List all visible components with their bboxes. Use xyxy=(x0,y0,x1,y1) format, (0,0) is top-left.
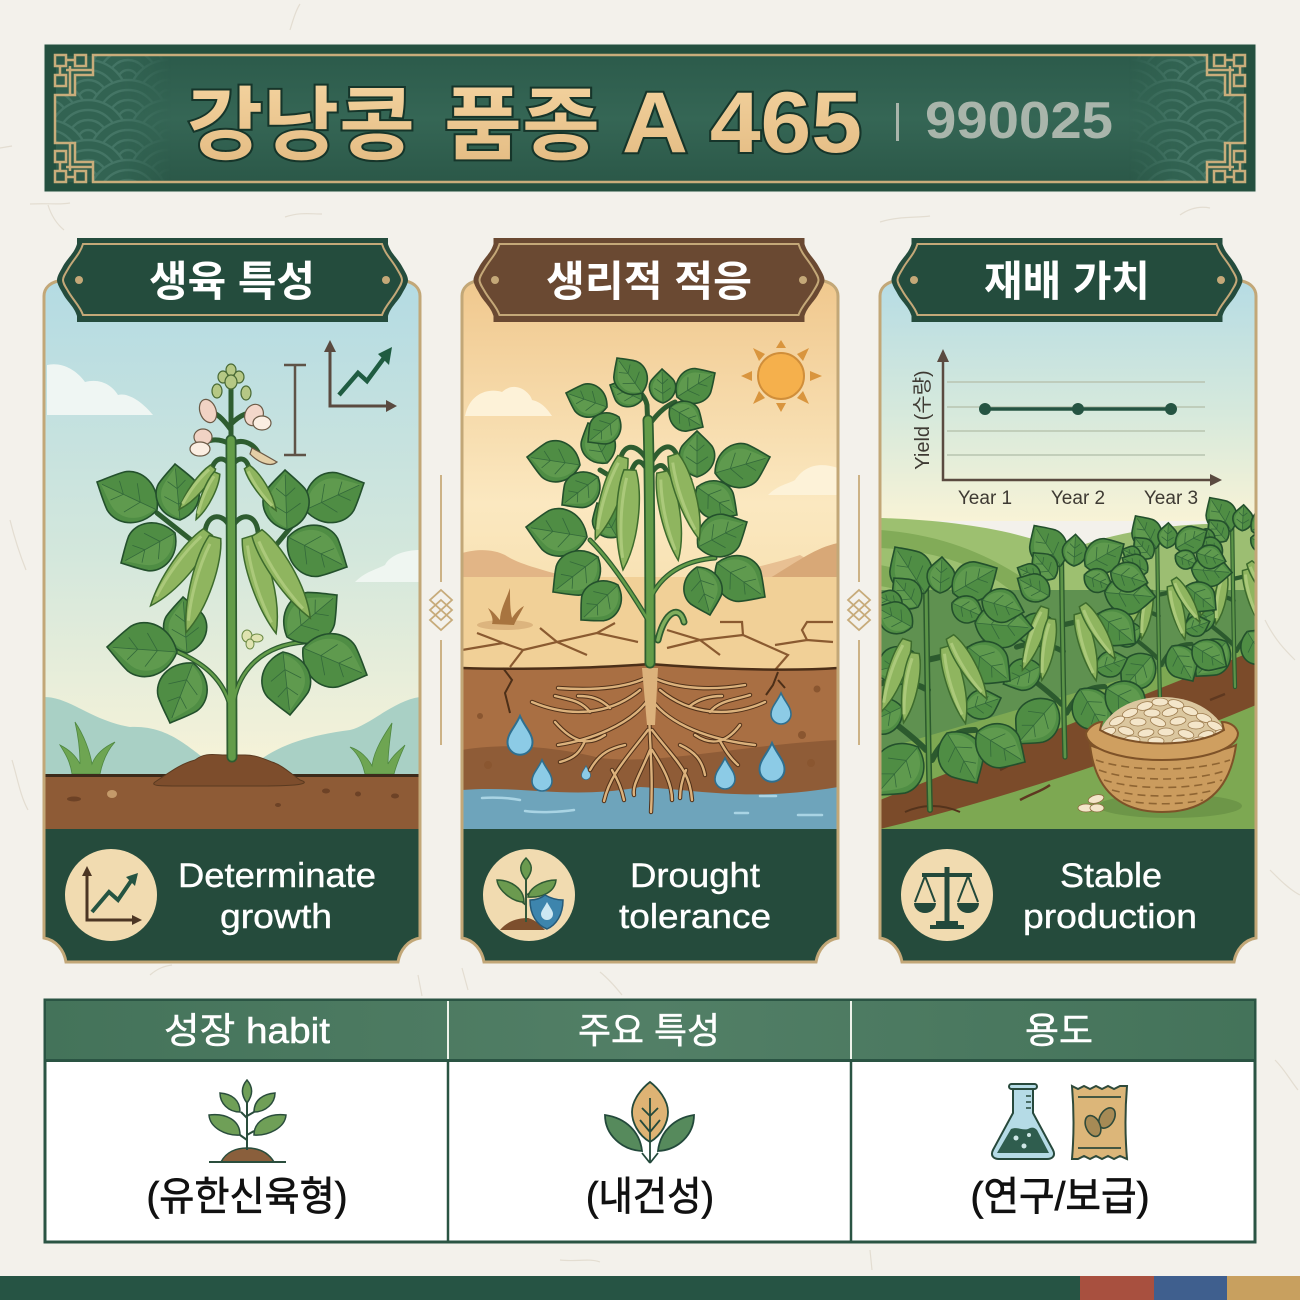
label strip xyxy=(880,829,1256,963)
chart: yield over years: Yield (수량) xyxy=(911,370,934,470)
icon: growth chart xyxy=(65,849,157,941)
icon: flask xyxy=(992,1084,1054,1159)
label: stable production: Stable xyxy=(1060,857,1162,895)
soil row and grass xyxy=(880,640,1256,829)
title text xyxy=(187,75,862,171)
sky and hills xyxy=(880,281,1256,790)
summary table xyxy=(45,1000,1255,1242)
underground soil xyxy=(462,664,838,800)
table header: use: 용도 xyxy=(1025,1010,1093,1051)
icon: seed bag xyxy=(1072,1086,1127,1159)
divider ornament xyxy=(430,475,452,745)
variety number: 990025 xyxy=(925,92,1113,150)
icon: seedling xyxy=(209,1080,286,1162)
text: drought tolerance: (내건성) xyxy=(586,1175,714,1219)
label strip xyxy=(462,829,838,963)
title text: 강낭콩 xyxy=(187,81,415,170)
chart: yield over years: Year 3 xyxy=(1144,488,1198,509)
basket of beans xyxy=(1078,697,1242,818)
bean plants row xyxy=(882,496,1254,813)
groundwater xyxy=(462,787,838,830)
label: stable production: production xyxy=(1023,898,1197,936)
banner: cultivation heading: 재배 가치 xyxy=(984,258,1150,305)
text: research and distribution: (연구/보급) xyxy=(970,1175,1150,1219)
plant with pods and flowers xyxy=(86,364,377,757)
icon: plant with water shield xyxy=(483,849,575,941)
panel: physiological adaptation xyxy=(462,281,838,963)
height bar xyxy=(284,365,306,455)
title text: A 465 xyxy=(622,75,862,171)
label: determinate growth: growth xyxy=(220,898,332,936)
panel: growth characteristics xyxy=(44,281,420,963)
grass tufts xyxy=(60,722,405,774)
banner: cultivation heading xyxy=(892,238,1242,322)
label: determinate growth xyxy=(178,857,376,936)
banner: physiology heading: 생리적 적응 xyxy=(546,258,752,305)
title banner xyxy=(44,44,1256,192)
chart: yield over years: Year 1 xyxy=(958,488,1012,509)
title text: 품종 xyxy=(444,81,600,170)
cracked ground xyxy=(464,577,836,668)
label: determinate growth: Determinate xyxy=(178,857,376,895)
label: drought tolerance: tolerance xyxy=(619,898,771,936)
label strip xyxy=(44,829,420,963)
arid sky xyxy=(462,281,838,578)
roots xyxy=(532,668,765,812)
label: drought tolerance: Drought xyxy=(630,857,761,895)
text: determinate type: (유한신육형) xyxy=(146,1175,348,1219)
banner: growth heading: 생육 특성 xyxy=(149,258,315,305)
bottom colour strip xyxy=(0,1276,1300,1300)
table header: growth habit: 성장 habit xyxy=(164,1010,330,1051)
table header: key trait: 주요 특성 xyxy=(578,1010,720,1051)
soil xyxy=(44,754,420,830)
plant with pods xyxy=(522,348,778,663)
banner: physiology heading xyxy=(474,238,824,322)
icon: growth axes xyxy=(324,340,397,412)
banner: growth heading xyxy=(57,238,408,322)
sun xyxy=(741,340,822,412)
panel: cultivation value xyxy=(878,280,1258,964)
icon: leaf trio xyxy=(605,1082,694,1163)
sky scene xyxy=(44,281,420,776)
label: stable production xyxy=(1023,857,1197,936)
water drops xyxy=(508,693,791,791)
chart: yield over years: Year 2 xyxy=(1051,488,1105,509)
label: drought tolerance xyxy=(619,857,771,936)
chart: yield over years xyxy=(911,349,1222,509)
divider ornament xyxy=(848,475,870,745)
icon: balance scale xyxy=(901,849,993,941)
